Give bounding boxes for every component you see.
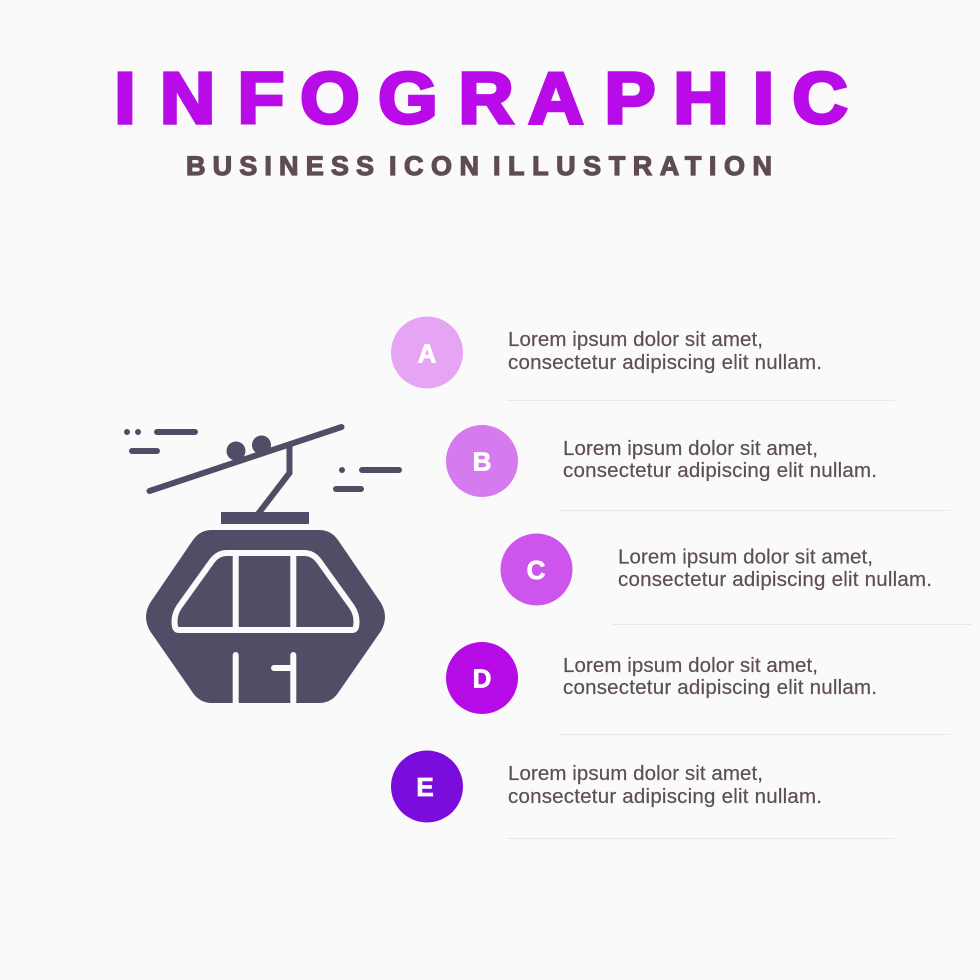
item A: consectetur adipiscing elit nullam. (508, 351, 822, 374)
item E (391, 750, 895, 839)
item B: consectetur adipiscing elit nullam. (563, 459, 877, 482)
item C: consectetur adipiscing elit nullam. (618, 568, 932, 591)
item D: consectetur adipiscing elit nullam. (563, 676, 877, 699)
item B: B (473, 446, 491, 476)
item B: Lorem ipsum dolor sit amet, (563, 437, 818, 460)
icon: cable car (124, 427, 399, 703)
item A (391, 316, 895, 401)
subtitle: BUSINESS (186, 151, 374, 181)
item B (446, 425, 950, 511)
icon: cabin door (236, 655, 293, 703)
item A: Lorem ipsum dolor sit amet, (508, 328, 763, 351)
item D (446, 642, 950, 735)
subtitle: ICON (389, 151, 479, 181)
item D: D (473, 664, 491, 694)
icon: motion lines right (336, 467, 399, 489)
subtitle: ILLUSTRATION (493, 151, 772, 181)
item C (500, 534, 972, 625)
item C: Lorem ipsum dolor sit amet, (618, 546, 873, 568)
item D: Lorem ipsum dolor sit amet, (563, 654, 818, 677)
item A: A (418, 338, 437, 368)
icon: cabin window (174, 553, 356, 630)
title: INFOGRAPHIC (114, 58, 848, 139)
subtitle (186, 151, 772, 181)
item E: E (416, 772, 434, 802)
item E: Lorem ipsum dolor sit amet, (508, 762, 763, 785)
item E: consectetur adipiscing elit nullam. (508, 785, 822, 808)
icon: cabin body (146, 530, 385, 703)
icon: motion lines left (124, 429, 195, 451)
item C: C (527, 555, 546, 585)
icon: cable, wheels and hanger (150, 427, 342, 524)
